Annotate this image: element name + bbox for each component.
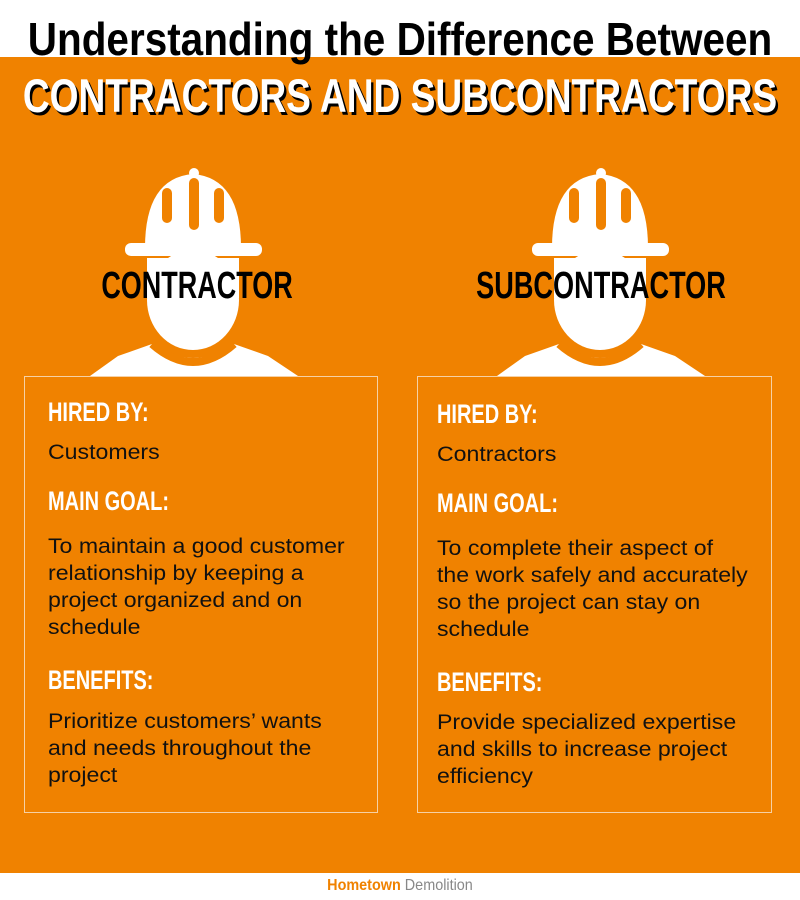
text: benefits: efficiency xyxy=(437,765,533,788)
text: benefits: project xyxy=(48,764,117,787)
heading: main goal: MAIN GOAL: xyxy=(48,486,169,516)
text: main goal: so the project can stay on xyxy=(437,591,700,614)
text: benefits: and skills to increase project xyxy=(437,738,727,761)
heading: benefits: BENEFITS: xyxy=(437,667,542,697)
text: main goal: To maintain a good customer xyxy=(48,535,345,558)
text: benefits xyxy=(48,710,322,787)
text: customers: Customers xyxy=(48,441,160,464)
text: main goal xyxy=(437,537,748,641)
text: contractors: Contractors xyxy=(437,443,556,466)
text: main goal xyxy=(48,535,345,639)
panel: subcontractor xyxy=(417,376,772,813)
label: subcontractor: SUBCONTRACTOR xyxy=(476,265,726,307)
label: contractor: CONTRACTOR xyxy=(101,265,293,307)
text: main goal: schedule xyxy=(437,618,529,641)
title line 2: CONTRACTORS AND SUBCONTRACTORS xyxy=(23,69,777,122)
text: main goal: To complete their aspect of xyxy=(437,537,713,560)
text: main goal: the work safely and accurately xyxy=(437,564,748,587)
text: main goal: schedule xyxy=(48,616,140,639)
heading: benefits: BENEFITS: xyxy=(48,665,153,695)
text: benefits: Prioritize customers’ wants xyxy=(48,710,322,733)
heading: hired by: HIRED BY: xyxy=(48,397,149,427)
icon: contractor worker xyxy=(90,168,298,376)
footer logo: Hometown Demolition xyxy=(327,877,473,894)
title line 1: Understanding the Difference Between xyxy=(28,13,772,65)
text: main goal: relationship by keeping a xyxy=(48,562,304,585)
text: benefits: and needs throughout the xyxy=(48,737,311,760)
text: benefits xyxy=(437,711,736,788)
heading: hired by: HIRED BY: xyxy=(437,399,538,429)
text: benefits: Provide specialized expertise xyxy=(437,711,736,734)
text: main goal: project organized and on xyxy=(48,589,302,612)
icon: subcontractor worker xyxy=(497,168,705,376)
panel: contractor xyxy=(24,376,378,813)
heading: main goal: MAIN GOAL: xyxy=(437,488,558,518)
